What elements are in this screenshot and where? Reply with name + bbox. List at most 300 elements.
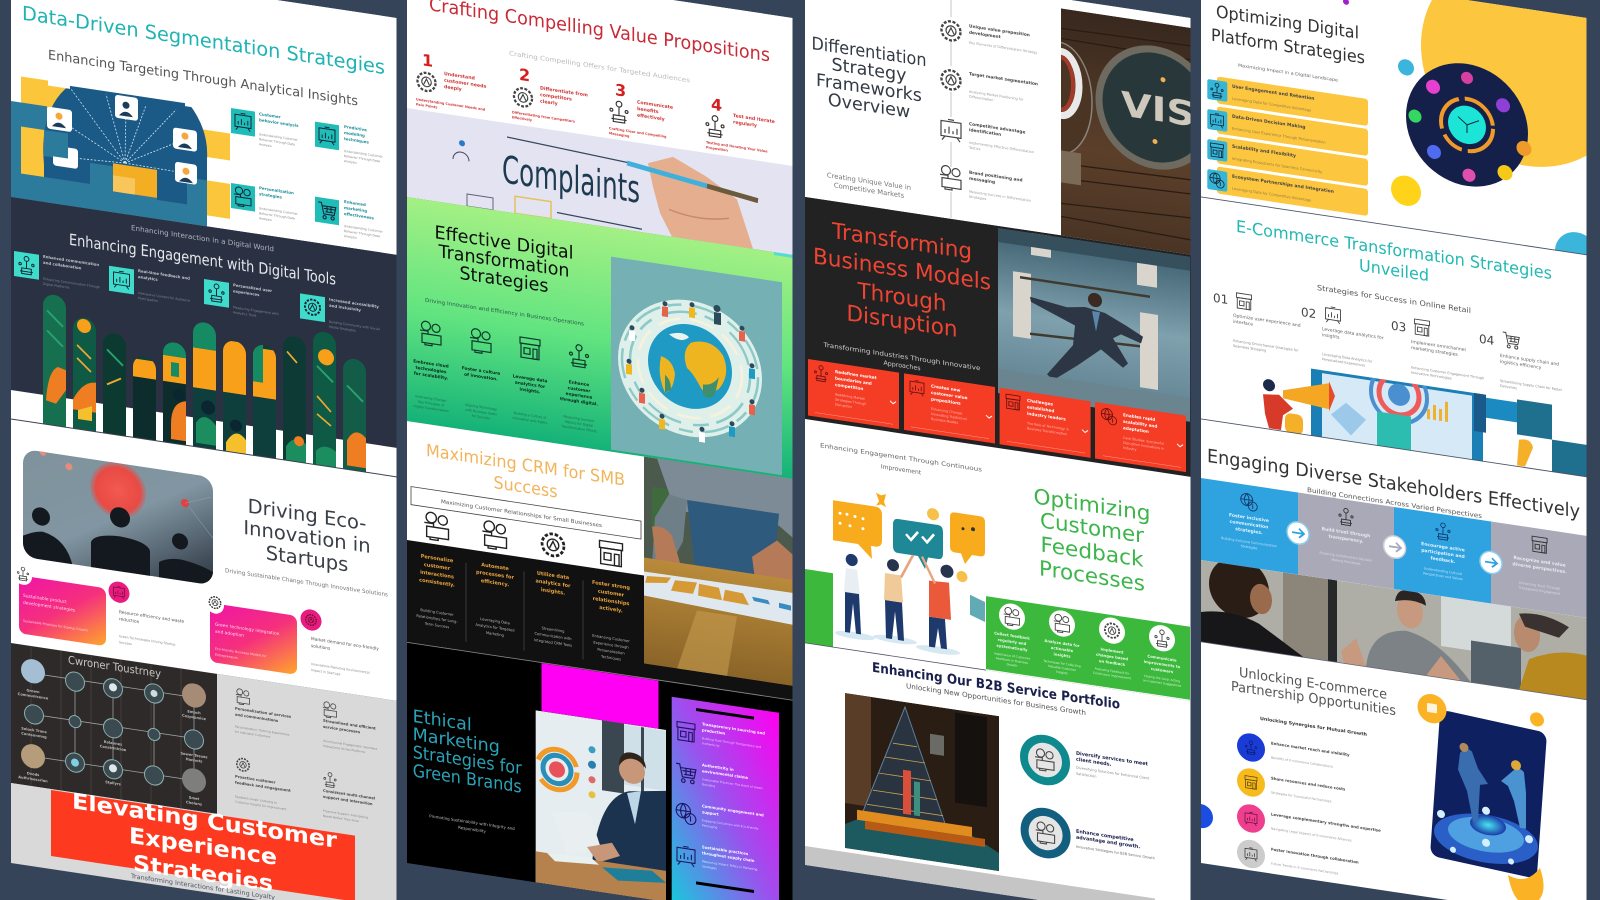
card: redefines market: Redefines market	[835, 369, 877, 380]
slide: Differentiation Strategy Frameworks Overview	[805, 0, 1211, 258]
card: redefines market: Disruption	[835, 403, 852, 409]
green strip panel	[986, 596, 1190, 700]
feature: multi-channel: Consistent multi-channel	[323, 789, 375, 801]
white base band	[11, 390, 397, 477]
step: collect: systematically	[997, 643, 1028, 652]
feature: personalization of services: Personalization: Tailoring Experiences	[235, 725, 290, 737]
feature: streamlined processes: Interactions Across Platforms	[323, 744, 366, 754]
slide: Optimizing Digital Platform Strategies	[1201, 0, 1600, 284]
title: Startups	[266, 541, 348, 577]
panel: build trust	[1298, 493, 1394, 589]
feature: predictive modeling: techniques	[344, 136, 369, 145]
feature: predictive modeling: Understanding Customer	[344, 149, 384, 159]
vertical rule	[950, 0, 952, 218]
step: collect: regularly and	[998, 637, 1027, 646]
column: culture: for Success	[472, 414, 490, 421]
title	[245, 498, 369, 573]
step 4: 4	[711, 95, 722, 115]
partner item 1	[1237, 731, 1350, 776]
slide: Engaging Diverse Stakeholders Effectively	[1201, 418, 1587, 700]
blue half circle	[1189, 802, 1213, 830]
framework item 2	[942, 67, 1038, 109]
title: Effective Digital	[434, 222, 573, 264]
item: resource efficiency: reduction	[119, 616, 140, 625]
framework item 1: development	[969, 30, 1001, 40]
feature: predictive modeling: Behavior Through Data	[344, 154, 380, 163]
title: Disruption	[847, 300, 957, 343]
panel: build trust: transparency.	[1329, 534, 1364, 545]
arrow 1	[1287, 520, 1309, 546]
framework item 3	[941, 117, 1034, 159]
feature: communication: Enhanced communication	[43, 254, 99, 267]
card: sustainable product: Sustainable Practices for Startup Growth	[23, 619, 88, 633]
bar: scalability: Scalability and Flexibility	[1232, 144, 1296, 159]
subtitle: Enhancing Engagement Through Continuous	[820, 442, 982, 474]
subtitle: Strategies for Success in Online Retail	[1317, 283, 1471, 315]
feature: multi-channel: support and interaction	[323, 795, 373, 806]
item: market demand: Market demand for eco-friendly	[311, 636, 379, 652]
subtitle: Maximizing Impact in a Digital Landscape	[1238, 63, 1338, 84]
column: automate: Analytics for Targeted	[475, 623, 515, 633]
column: foster: Experience through	[593, 640, 629, 650]
card: sustainable product	[14, 565, 106, 646]
column: automate: processes for	[476, 569, 514, 581]
subtitle: Crafting Compelling Offers for Targeted Audiences	[509, 50, 690, 84]
panel: encourage participation: Encourage active	[1421, 541, 1465, 554]
step 03: 03	[1391, 319, 1406, 335]
title: Transforming	[831, 218, 972, 265]
framework item 3: Tactics	[968, 145, 981, 151]
card: redefines market	[808, 359, 899, 429]
panel: foster inclusive: strategies.	[1235, 526, 1263, 536]
step: analyze: Valuable Customer	[1048, 664, 1077, 672]
photo: customer journey board: Selock Trans	[21, 727, 47, 734]
photo: three colleagues talking	[1201, 552, 1587, 700]
title	[813, 215, 991, 348]
feature: predictive modeling: Predictive	[344, 124, 367, 132]
feature: enhanced marketing: Analysis	[344, 234, 357, 240]
title: Marketing	[413, 725, 500, 758]
feature: personalization: strategies	[259, 191, 282, 200]
panel: recognize perspectives: Transparent Engagement	[1518, 586, 1561, 596]
panel: build trust: Build trust through	[1322, 526, 1370, 539]
feature: predictive modeling	[315, 122, 383, 164]
column: foster: actively.	[599, 605, 623, 614]
illustration: team with speech bubbles	[833, 486, 985, 660]
step: implement: on feedback	[1099, 658, 1126, 667]
column: personalize: Personalize	[421, 554, 454, 565]
title: Enhancing Engagement with Digital Tools	[69, 231, 336, 289]
bar: user engagement: User Engagement and Retention	[1232, 84, 1314, 102]
card: enables scalability: Disruption Innovations in	[1123, 441, 1164, 451]
subtitle	[822, 342, 981, 381]
partner item 3: Navigating Legal Aspects of E-commerce Alliances	[1271, 827, 1352, 843]
step 01: Optimize user experience and	[1233, 313, 1301, 329]
card: creates value: Innovating Traditional	[931, 412, 967, 421]
card: redefines market: boundaries and	[835, 376, 872, 386]
step 2: Effectively	[512, 115, 533, 122]
feature: multi-channel: Needs Before They Arise	[323, 814, 359, 823]
step 01: Enhancing Omnichannel Strategies for	[1233, 339, 1299, 353]
yellow badge	[1418, 692, 1446, 725]
subtitle: Improvement	[881, 463, 922, 477]
service: diversify	[1024, 736, 1150, 797]
item: market demand: solutions	[311, 643, 331, 652]
photo: customer journey board: Cholons	[186, 800, 202, 807]
title: Platform Strategies	[1211, 26, 1365, 69]
framework item 4: Measuring Success in Differentiation	[969, 190, 1031, 203]
subtitle: Creating Unique Value in	[827, 171, 911, 192]
title: Unlocking E-commerce	[1239, 665, 1387, 703]
step: communicate: Communicate	[1147, 653, 1177, 663]
slide: Transforming Business Models Through Disruption	[805, 197, 1191, 477]
step 1: customer needs	[444, 78, 486, 90]
column: personalize: customer	[424, 562, 451, 572]
column: culture: of innovation.	[464, 372, 498, 383]
title: Transformation	[438, 241, 570, 282]
title: Partnership Opportunities	[1231, 679, 1396, 719]
feature: personalized: experiences	[233, 288, 260, 297]
step: analyze: Analyze data for	[1044, 638, 1080, 648]
panel: encourage participation: participation and	[1421, 548, 1465, 560]
column: automate: Automate	[481, 562, 509, 572]
column: utilize: insights.	[541, 587, 565, 597]
column: cloud: Digital Transformation	[413, 404, 449, 413]
feature: communication: and collaboration	[43, 260, 82, 271]
column: experience	[560, 342, 598, 434]
item: authenticity: Authenticity in	[702, 762, 734, 772]
title: Optimizing	[1033, 483, 1150, 526]
photo: man with tablet	[535, 710, 667, 900]
panel: recognize perspectives: Enhancing Trust Through	[1519, 581, 1560, 591]
column: personalize: Term Success	[424, 622, 449, 629]
small dot	[1530, 711, 1544, 727]
item: resource efficiency: Resource efficiency and waste	[119, 609, 184, 625]
framework item 4: messaging	[969, 176, 995, 185]
photo: customer journey board: Sower Tesses	[180, 751, 208, 759]
card: creates value: Creates new	[931, 383, 960, 393]
framework item 1	[942, 19, 1037, 55]
column: experience: Measuring Success:	[563, 414, 595, 423]
card: challenges leaders: The Role of Technology in	[1026, 421, 1069, 432]
column 4	[1189, 0, 1600, 900]
step: collect: Collect feedback	[994, 630, 1030, 641]
slide: Elevating Customer Experience Strategies	[11, 643, 397, 900]
feature: customer behavior: Understanding Customer	[259, 132, 299, 142]
column: utilize: analytics for	[535, 578, 571, 590]
feature: predictive modeling: Analysis	[344, 159, 357, 165]
photo: man leaping in building	[998, 228, 1190, 423]
feature: customer behavior	[231, 108, 298, 147]
framework item 3: Implementing Effective Differentiation	[969, 141, 1034, 154]
card: green technology	[206, 594, 297, 675]
subtitle: Driving Innovation and Efficiency in Business Operations	[425, 298, 584, 328]
column: foster: customer	[598, 589, 625, 599]
card: creates value: customer value	[931, 390, 968, 400]
item: resource efficiency: Green Technologies Driving Startup	[119, 634, 175, 647]
column: culture: Aligning Technology	[465, 403, 497, 411]
feature: accessibility: and inclusivity	[329, 303, 361, 313]
feature: proactive feedback: Customer Insights for Improvement	[235, 800, 287, 811]
title: Optimizing Digital	[1216, 2, 1359, 44]
step 01	[1213, 289, 1301, 358]
feature: personalized: Analytics Tools	[233, 310, 257, 318]
step: analyze: insights	[1053, 651, 1071, 659]
item: transparency: Building Trust Through Transparency and	[702, 736, 761, 749]
service: diversify: Diversify services to meet	[1076, 751, 1149, 768]
photo: customer journey board: Grown	[26, 688, 40, 694]
title: E-Commerce Transformation Strategies	[1236, 217, 1552, 283]
column: foster: relationships	[593, 596, 629, 607]
step 1: Understand	[444, 71, 475, 82]
title: Success	[494, 473, 558, 503]
step 02: 02	[1301, 305, 1316, 321]
step: communicate: Closing the Loop: Acting	[1144, 674, 1180, 683]
photo: customer journey board: Hannots	[186, 757, 202, 764]
service: diversify: client needs.	[1076, 757, 1112, 768]
green left band	[805, 569, 833, 647]
feature: predictive modeling: modeling	[344, 130, 365, 138]
title: Elevating Customer	[72, 788, 337, 854]
subtitle box	[411, 487, 641, 539]
item: sustainable practices: Strategies	[702, 864, 717, 871]
title: Customer	[1040, 507, 1144, 548]
column: experience: Metrics for Digital	[565, 420, 593, 428]
ring of people	[626, 291, 755, 450]
overline: Enhancing Interaction in a Digital World	[131, 223, 274, 253]
feature: enhanced marketing: Behavior Through Data	[344, 229, 380, 238]
step: implement	[1093, 615, 1132, 681]
feature: feedback: analytics	[138, 274, 158, 282]
feature: streamlined processes: Omnichannel Engagement: Seamless	[323, 739, 378, 751]
column: data: analytics for	[515, 380, 546, 390]
step 1: 1	[422, 50, 433, 71]
column: foster: Techniques	[600, 654, 621, 662]
title	[1231, 664, 1396, 719]
card: green technology: Green technology integration	[215, 622, 280, 637]
item: sustainable practices: throughout supply chain	[702, 850, 755, 863]
subtitle: Driving Sustainable Change Through Innovative Solutions	[225, 568, 388, 599]
item: market demand: Impact in Startups	[311, 668, 341, 676]
step 3: Communicate	[637, 100, 673, 111]
step 03: Implement omnichannel	[1411, 339, 1466, 353]
step 2: Differentiating from Competitors	[512, 110, 575, 124]
column: data: insights.	[520, 386, 541, 396]
subtitle	[820, 442, 982, 486]
illustration: marketer and dashboard	[1263, 346, 1587, 479]
service: competitive advantage: Innovative Strategies for B2B Service Growth	[1076, 845, 1155, 860]
item: transparency: production	[702, 727, 726, 736]
step 4: Testing and Iterating Your Value	[706, 140, 768, 154]
step 4: Test and iterate	[733, 113, 775, 125]
step 02: Leveraging Data Analytics for	[1322, 352, 1373, 364]
step 04: Streamlining Supply Chain for Faster	[1500, 379, 1563, 392]
column: personalize: Building Customer	[420, 608, 454, 617]
step: implement: Analyzing Feedback for	[1095, 666, 1130, 676]
column: culture	[462, 327, 500, 422]
title: Frameworks	[816, 71, 922, 107]
subtitle: Transforming Industries Through Innovative	[822, 342, 981, 372]
feature: customer behavior: Analysis	[259, 142, 272, 148]
step 3: Messaging	[609, 131, 630, 138]
feature: accessibility: Increased accessibility	[329, 297, 379, 309]
slide: E-Commerce Transformation Strategies Unveiled	[1201, 196, 1587, 479]
photo: customer journey board: Stpllyrs	[105, 780, 121, 786]
photo: customer journey board: Emoch	[187, 709, 201, 716]
column: foster: Personalization	[597, 648, 625, 656]
framework item 4: Brand positioning and	[969, 170, 1023, 184]
feature: personalization: Understanding Customer	[259, 206, 299, 216]
title: Through	[857, 278, 947, 317]
step: analyze	[1042, 608, 1081, 677]
feature: feedback: Interactive Content for Audience	[138, 291, 190, 303]
item: authenticity: environmental claims	[702, 768, 749, 780]
subtitle: Approaches	[883, 360, 921, 372]
photo: customer journey board: Ovods	[27, 771, 39, 777]
subtitle: Unlocking Synergies for Mutual Growth	[1260, 716, 1367, 738]
step 3: benefits	[637, 106, 659, 115]
title: Business Models	[813, 243, 991, 296]
partner item 3: Leverage complementary strengths and expertise	[1271, 812, 1381, 833]
card: challenges leaders: Business Transformation	[1027, 426, 1067, 436]
title	[413, 707, 522, 798]
feature: multi-channel	[323, 772, 375, 826]
title	[74, 792, 337, 891]
title: Green Brands	[413, 761, 522, 798]
service: competitive advantage: advantage and growth.	[1076, 835, 1140, 850]
step 03: Innovative Technologies	[1411, 371, 1452, 381]
card: redefines market: competition	[835, 382, 863, 391]
column: automate: Marketing	[486, 631, 504, 638]
column: automate: Leveraging Data	[480, 617, 510, 625]
column: experience: Transformation Efforts	[560, 424, 597, 433]
service: competitive advantage	[1025, 809, 1155, 870]
item: sustainable practices: Measuring Impact: Ethics in Marketing	[702, 859, 758, 872]
step 1: deeply	[444, 84, 462, 93]
framework item 1: Unique value proposition	[969, 23, 1030, 38]
slide: Ethical Marketing Strategies for Green Brands	[407, 642, 793, 900]
column: personalize	[416, 553, 458, 631]
framework item 2: Differentiation	[969, 95, 993, 102]
photo: customer journey board: Rolannes	[104, 740, 122, 747]
feature: proactive feedback	[235, 757, 291, 812]
step 1: Understanding Customer Needs and	[416, 97, 486, 112]
feature: personalization	[231, 183, 298, 221]
step 04: Deliveries	[1500, 384, 1517, 390]
red title block	[51, 790, 355, 900]
arched illustration strips	[43, 294, 366, 472]
title: Maximizing CRM for SMB	[426, 441, 625, 491]
framework item 4	[940, 165, 1031, 208]
feature: proactive feedback: Proactive customer	[235, 775, 276, 785]
column: cloud: Embrace cloud	[413, 358, 449, 370]
item: sustainable practices: Sustainable practices	[702, 844, 749, 856]
service: diversify: Satisfaction	[1076, 772, 1096, 779]
title: Innovation in	[243, 516, 371, 558]
step: communicate: on Customer Suggestions	[1143, 678, 1182, 688]
step 4: regularly	[733, 119, 757, 129]
title: Data-Driven Segmentation Strategies	[22, 2, 385, 79]
slide: Crafting Compelling Value Propositions	[407, 0, 793, 255]
item: sustainable practices	[677, 841, 758, 877]
item: transparency: Transparency in sourcing and	[702, 721, 765, 736]
decorative circles	[1343, 0, 1600, 285]
panel: foster inclusive: Building Inclusive Communication	[1221, 536, 1277, 548]
photo: glass pyramid	[845, 693, 999, 871]
step 04: Enhance supply chain and	[1500, 353, 1559, 368]
card: challenges leaders	[1000, 388, 1091, 458]
title: Enhancing Our B2B Service Portfolio	[872, 660, 1120, 713]
step 02: insights	[1322, 332, 1340, 341]
feature: personalization of services: and communications	[235, 713, 279, 723]
column 2	[407, 0, 793, 900]
step 2: 2	[519, 65, 530, 85]
step 02: Leverage data analytics for	[1322, 326, 1384, 341]
step 1: Pain Points	[416, 102, 437, 110]
bar: user engagement	[1207, 75, 1368, 126]
title: Engaging Diverse Stakeholders Effectively	[1207, 446, 1580, 523]
framework item 2: Analyzing Market Positioning for	[969, 90, 1024, 102]
column dividers	[466, 563, 583, 659]
column: personalize: Relationships for Long-	[416, 614, 458, 624]
service: diversify: Diversifying Solutions for Enhanced Client	[1076, 766, 1150, 781]
step 01: Seamless Shopping	[1233, 344, 1266, 353]
feature: personalization: Personalization	[259, 185, 294, 195]
icon row	[424, 511, 622, 568]
feature: streamlined processes: service processes	[323, 725, 361, 734]
column: culture: Foster a culture	[462, 365, 500, 377]
title: Strategies	[133, 850, 273, 897]
column: data: Leverage data	[513, 373, 547, 385]
feature: customer behavior: Customer	[259, 111, 281, 119]
bar: user engagement: Leveraging Data for Competitive Advantage	[1232, 97, 1312, 113]
column: experience: experience	[566, 391, 592, 401]
step 2: Differentiate from	[540, 85, 588, 99]
photo: customer journey board: Cwroner Toustrney	[68, 654, 161, 681]
column: foster: Foster strong	[592, 580, 630, 591]
step: analyze: Techniques for Collecting	[1042, 659, 1081, 668]
title	[1034, 483, 1150, 597]
panel: build trust: Fostering Collaborative Decision	[1320, 551, 1372, 563]
card: green technology: Entrepreneurs	[215, 653, 238, 660]
step 1	[416, 49, 486, 117]
feature: accessibility: Media Strategies	[329, 325, 356, 333]
card: challenges leaders: established	[1027, 404, 1054, 413]
slide: Driving Eco-Innovation in Startups	[11, 418, 397, 701]
subtitle	[827, 171, 911, 201]
column: data: Building a Culture of	[514, 411, 547, 420]
photo: people facing red sphere	[21, 446, 213, 588]
feature: enhanced marketing: effectiveness	[344, 211, 375, 221]
step: communicate: improvements to	[1144, 659, 1181, 669]
column: cloud: technologies	[416, 365, 447, 375]
slide: Maximizing CRM for SMB Success	[407, 421, 793, 700]
subtitle: Responsibility	[458, 825, 486, 834]
feature: accessibility: Building Community with Social	[329, 320, 380, 331]
step 01: 01	[1213, 291, 1228, 307]
photo: bulb and vision sign: VIS	[1121, 85, 1195, 135]
photo: customer journey board: Constrmicioe	[100, 744, 127, 752]
photo: customer journey board: Contsonmng	[21, 732, 47, 739]
panel: build trust: Making Processes	[1331, 558, 1361, 566]
framework item 2: Target market segmentation	[969, 71, 1038, 87]
card: challenges leaders: industry leaders	[1027, 411, 1066, 422]
globe panel	[611, 257, 782, 475]
photo: glowing handshake	[1430, 708, 1547, 880]
title	[1211, 2, 1365, 69]
feature: personalization of services	[235, 688, 292, 742]
photo: analyst at table	[644, 457, 793, 686]
